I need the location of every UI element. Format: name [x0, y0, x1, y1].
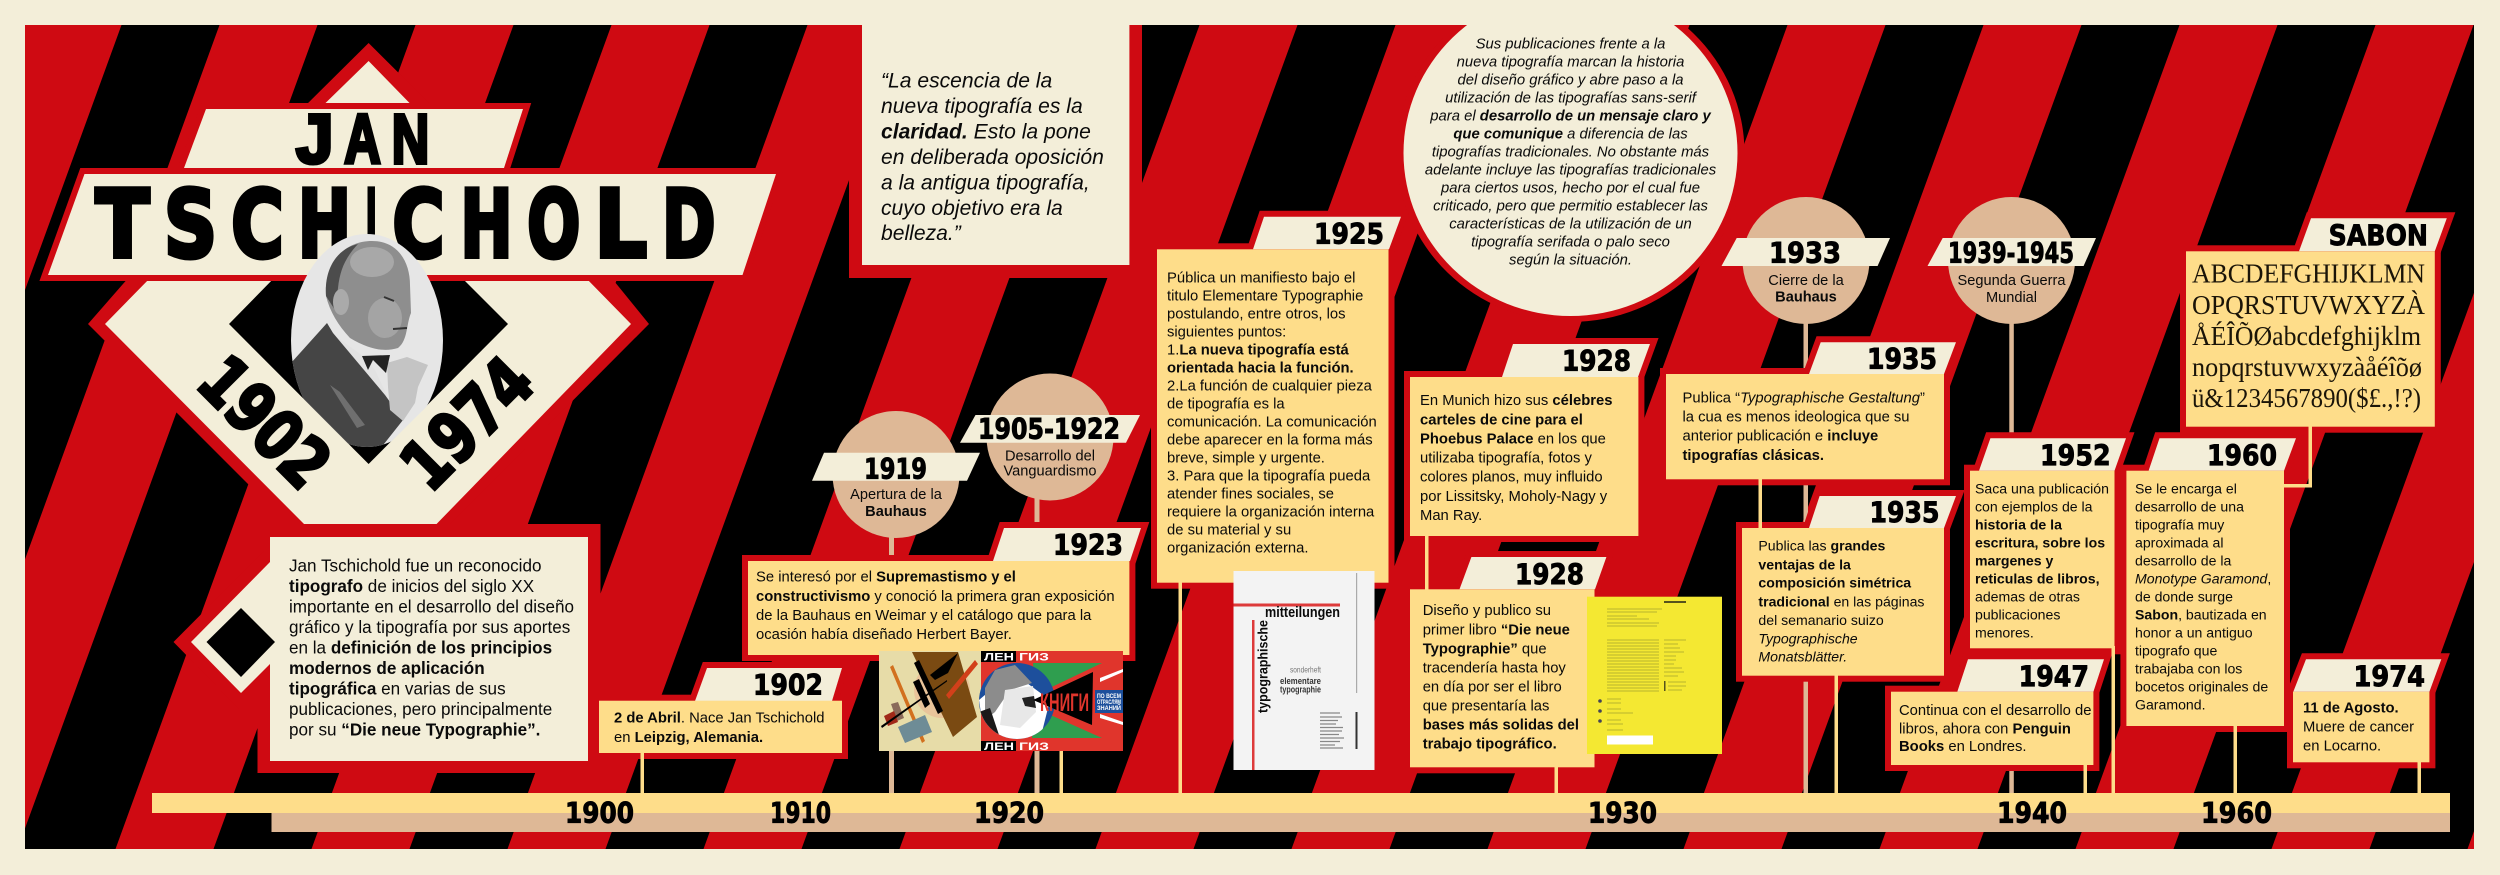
- event: 1902 box: en Leipzig, Alemania.: [614, 730, 763, 746]
- image: mitteilungen cover: elementare: [1280, 676, 1321, 687]
- timeline year labels: 1900: [565, 797, 634, 830]
- panel: circle about publications: [1396, 0, 1744, 322]
- image: Rodchenko book poster: [979, 651, 1123, 753]
- event: 1933 circle: Bauhaus: [1775, 290, 1837, 306]
- event: 1960 box: desarrollo de la: [2135, 552, 2232, 568]
- event: 1928 box, Die neue Typographie: tracendería hasta hoy: [1423, 660, 1566, 676]
- panel: Sabon specimen: OPQRSTUVWXYZÀ: [2192, 290, 2425, 320]
- event: 1960 box: de donde surge: [2135, 588, 2233, 604]
- event: 1925 box: requiere la organización interna: [1167, 504, 1375, 520]
- event: 1902 box: [599, 668, 842, 753]
- quote text: cuyo objetivo era la: [881, 197, 1063, 220]
- event: 1960 box: tipografía muy: [2135, 516, 2225, 532]
- event: 1960 box: Sabon, bautizada en: [2135, 606, 2267, 622]
- panel: Sabon specimen: SABON: [2329, 220, 2428, 253]
- circle text: características de la utilización de un: [1449, 216, 1692, 232]
- event: 1960 box: honor a un antiguo: [2135, 624, 2253, 640]
- event: 1928 box, cinema posters: colores planos, muy influido: [1420, 470, 1603, 486]
- name banner TSCHICHOLD: H: [460, 170, 512, 278]
- lower diamond with black centre: [88, 276, 649, 540]
- circle text: para el desarrollo de un mensaje claro y: [1429, 108, 1711, 124]
- circle text: según la situación.: [1509, 252, 1632, 268]
- event: 1935 box, composición simétrica: del semanario suizo: [1758, 612, 1884, 628]
- name banner TSCHICHOLD: C: [392, 170, 444, 278]
- name banner TSCHICHOLD: L: [594, 170, 647, 278]
- event: 1952 box: margenes y: [1975, 552, 2054, 568]
- event: 1952 box: ademas de otras: [1975, 588, 2080, 604]
- event: 1928 box, cinema posters: utilizaba tipografía, fotos y: [1420, 450, 1593, 466]
- name banner TSCHICHOLD: C: [231, 170, 284, 278]
- event: 1933 circle: Cierre de la: [1768, 273, 1845, 289]
- event: 1925 box: de tipografía es la: [1167, 396, 1285, 412]
- event: 1923 box: [748, 528, 1141, 655]
- biography text: gráfico y la tipografía por sus aportes: [289, 618, 570, 637]
- biography text: importante en el desarrollo del diseño: [289, 598, 574, 617]
- event: 1960 box: tipografo que: [2135, 642, 2217, 658]
- image: Rodchenko book poster: ГИЗ: [1019, 741, 1049, 753]
- event: 1919 circle: Bauhaus: [865, 504, 927, 520]
- name banner JAN: [184, 100, 523, 178]
- name banner TSCHICHOLD: S: [164, 170, 217, 278]
- event: 1960 box: [2126, 438, 2296, 726]
- event: 1905-1922 circle: 1905-1922: [978, 413, 1120, 446]
- image: Rodchenko book poster: ЗНАНИЙ: [1097, 704, 1121, 712]
- event: 1947 box: [1891, 659, 2104, 765]
- event: 1925 box: 3. Para que la tipografía pueda: [1167, 468, 1371, 484]
- event: 1960 box: aproximada al: [2135, 534, 2224, 550]
- panel: Sabon specimen: ü&1234567890($£.,!?): [2192, 383, 2421, 413]
- biography text: Jan Tschichold fue un reconocido: [289, 557, 541, 576]
- circle text: del diseño gráfico y abre paso a la: [1457, 72, 1684, 88]
- event: 1935 box, Typographische Gestaltung: [1666, 342, 1956, 479]
- circle text: que comunique a diferencia de las: [1453, 126, 1688, 142]
- name banner TSCHICHOLD: O: [527, 170, 580, 278]
- panel: Sabon specimen: [2186, 218, 2447, 427]
- timeline year labels: 1920: [974, 797, 1044, 830]
- triangle ornament: [300, 43, 437, 111]
- event: 1928 box, Die neue Typographie: bases más solidas del: [1423, 717, 1579, 733]
- event: 1952 box: publicaciones: [1975, 606, 2060, 622]
- event: 1935 box, Typographische Gestaltung: anterior publicación e incluye: [1682, 429, 1878, 445]
- event: 1928 box, Die neue Typographie: Typographie” que: [1423, 641, 1547, 657]
- event: 1974 box: [2293, 659, 2441, 762]
- event: 1928 box, cinema posters: Man Ray.: [1420, 508, 1482, 524]
- red outlines behind the timeline boxes: [599, 217, 2447, 767]
- event: 1928 box, cinema posters: En Munich hizo sus célebres: [1420, 393, 1612, 409]
- event: 1928 box, Die neue Typographie: que presentaría las: [1423, 699, 1549, 715]
- event: 1935 box, composición simétrica: Typographische: [1758, 630, 1858, 646]
- event: 1935 box, composición simétrica: [1742, 496, 1956, 676]
- event: 1925 box: atender fines sociales, se: [1167, 486, 1334, 502]
- event: 1925 box: 2.La función de cualquier pieza: [1167, 378, 1373, 394]
- event: 1974 box: en Locarno.: [2303, 739, 2381, 755]
- image: mitteilungen cover: [1234, 571, 1374, 770]
- event: 1925 box: [1157, 217, 1401, 583]
- panel: Sabon specimen: ÅÉÎÕØabcdefghijklm: [2192, 321, 2421, 351]
- event: 1925 box: orientada hacia la función.: [1167, 360, 1354, 376]
- circle text: adelante incluye las tipografías tradicionales: [1425, 162, 1717, 178]
- event: 1960 box: Se le encarga el: [2135, 480, 2237, 496]
- event: 1925 box: de su material y su: [1167, 522, 1291, 538]
- event: 1928 box, Die neue Typographie: en día por ser el libro: [1423, 680, 1562, 696]
- event: 1902 box: 2 de Abril. Nace Jan Tschichold: [614, 710, 825, 726]
- event: 1928 box, cinema posters: Phoebus Palace en los que: [1420, 431, 1606, 447]
- name banner TSCHICHOLD: T: [96, 170, 149, 278]
- event: 1947 box: libros, ahora con Penguin: [1899, 721, 2071, 737]
- event: 1902 box: 1902: [753, 669, 823, 702]
- event: 1923 box: ocasión había diseñado Herbert Bayer.: [756, 627, 1012, 643]
- event: 1925 box: 1925: [1314, 218, 1384, 251]
- event: 1923 box: Se interesó por el Supremastismo y el: [756, 570, 1016, 586]
- event: 1935 box, Typographische Gestaltung: Publica “Typographische Gestaltung”: [1682, 390, 1925, 406]
- tan connector stems for the circles: [889, 320, 2014, 795]
- event: 1960 box: trabajaba con los: [2135, 660, 2242, 676]
- event: 1925 box: 1.La nueva tipografía está: [1167, 342, 1350, 358]
- birth year 1902: 1902: [182, 341, 345, 505]
- name banner TSCHICHOLD: I: [366, 170, 377, 278]
- event: 1905-1922 circle: Desarrollo del: [1005, 449, 1095, 465]
- image: Rodchenko book poster: ЛЕН: [984, 652, 1014, 664]
- event: 1919 circle: 1919: [864, 453, 927, 486]
- event: 1935 box, composición simétrica: 1935: [1870, 497, 1940, 530]
- image: Rodchenko book poster: ЛЕН: [984, 741, 1014, 753]
- circle text: Sus publicaciones frente a la: [1476, 36, 1665, 52]
- circle text: nueva tipografía marcan la historia: [1457, 54, 1684, 70]
- event: 1928 box, cinema posters: [1410, 344, 1650, 536]
- event: 1960 box: desarrollo de una: [2135, 498, 2244, 514]
- event: 1935 box, Typographische Gestaltung: 1935: [1867, 343, 1937, 376]
- biography text: en la definición de los principios: [289, 639, 552, 658]
- event: 1905-1922 circle: Vanguardismo: [1003, 464, 1097, 480]
- event: 1939-1945 circle: [1928, 197, 2096, 324]
- event: 1960 box: bocetos originales de: [2135, 678, 2268, 694]
- image: yellow book page: [1587, 597, 1722, 754]
- event: 1923 box: de la Bauhaus en Weimar y el catálogo que para la: [756, 608, 1092, 624]
- biography text: tipográfica en varias de sus: [289, 680, 506, 699]
- event: 1974 box: Muere de cancer: [2303, 720, 2414, 736]
- event: 1928 box, Die neue Typographie: primer libro “Die neue: [1423, 622, 1570, 638]
- circle text: [1425, 36, 1717, 268]
- image: mitteilungen cover: mitteilungen: [1265, 605, 1340, 621]
- event: 1952 box: 1952: [2040, 439, 2111, 472]
- death year 1974: 1974: [386, 343, 550, 506]
- panel: Sabon specimen: nopqrstuvwxyzàåéîõø: [2192, 352, 2422, 382]
- timeline year labels: [565, 797, 2272, 830]
- quote text: [881, 70, 1104, 245]
- timeline year labels: 1910: [770, 797, 831, 830]
- biography text: modernos de aplicación: [289, 659, 485, 678]
- icon: black diamond: [206, 608, 275, 677]
- panel: biography: [174, 524, 600, 773]
- event: 1935 box, composición simétrica: composición simétrica: [1758, 575, 1911, 591]
- event: 1952 box: menores.: [1975, 624, 2034, 640]
- event: 1935 box, composición simétrica: ventajas de la: [1758, 556, 1851, 572]
- event: 1960 box: Garamond.: [2135, 696, 2206, 712]
- event: 1919 circle: Apertura de la: [850, 487, 943, 503]
- image: mitteilungen cover: typographie: [1280, 685, 1321, 696]
- event: 1928 box, Die neue Typographie: 1928: [1515, 558, 1584, 591]
- event: 1928 box, cinema posters: por Lissitsky, Moholy-Nagy y: [1420, 489, 1608, 505]
- event: 1935 box, composición simétrica: tradicional en las páginas: [1758, 594, 1924, 610]
- event: 1925 box: titulo Elementare Typographie: [1167, 288, 1363, 304]
- name banner JAN: J: [296, 100, 334, 178]
- biography text: publicaciones, pero principalmente: [289, 700, 552, 719]
- event: 1905-1922 circle: [960, 374, 1140, 500]
- quote text: a la antigua tipografía,: [881, 172, 1090, 194]
- event: 1928 box, Die neue Typographie: [1410, 557, 1606, 767]
- circle text: tipografía serifada o palo seco: [1471, 234, 1670, 250]
- event: 1939-1945 circle: Segunda Guerra: [1958, 273, 2066, 289]
- event: 1923 box: constructivismo y conoció la primera gran exposición: [756, 589, 1115, 605]
- quote text: nueva tipografía es la: [881, 95, 1083, 118]
- event: 1928 box, cinema posters: carteles de cine para el: [1420, 412, 1583, 428]
- image: suprematist painting: [879, 651, 981, 751]
- name banner TSCHICHOLD: D: [662, 170, 716, 278]
- event: 1935 box, Typographische Gestaltung: tipografías clásicas.: [1682, 448, 1824, 464]
- event: 1974 box: 1974: [2354, 661, 2425, 694]
- event: 1935 box, composición simétrica: Monatsblätter.: [1758, 649, 1847, 665]
- event: 1952 box: con ejemplos de la: [1975, 498, 2093, 514]
- quote text: en deliberada oposición: [881, 146, 1104, 169]
- yellow connector stems for the boxes: [640, 425, 2421, 795]
- event: 1925 box: debe aparecer en la forma más: [1167, 432, 1373, 448]
- image: Rodchenko book poster: КНИГИ: [1040, 689, 1089, 717]
- biography text: [289, 557, 574, 740]
- event: 1952 box: [1970, 438, 2126, 648]
- title block: [48, 43, 776, 540]
- timeline year labels: 1960: [2201, 797, 2272, 830]
- panel: quote: [849, 25, 1142, 278]
- name banner TSCHICHOLD: H: [298, 170, 351, 278]
- biography text: tipografo de inicios del siglo XX: [289, 577, 535, 596]
- event: 1952 box: reticulas de libros,: [1975, 570, 2100, 586]
- timeline year labels: 1930: [1588, 797, 1657, 830]
- image: Rodchenko book poster: ГИЗ: [1019, 652, 1049, 664]
- name banner JAN: N: [392, 100, 429, 178]
- event: 1952 box: escritura, sobre los: [1975, 534, 2105, 550]
- event: 1928 box, Die neue Typographie: Diseño y publico su: [1423, 603, 1551, 619]
- circle text: utilización de las tipografías sans-serif: [1445, 90, 1698, 106]
- image: Rodchenko book poster: ПО ВСЕМ: [1097, 694, 1121, 700]
- panel: Sabon specimen: ABCDEFGHIJKLMN: [2192, 259, 2425, 289]
- event: 1923 box: 1923: [1053, 529, 1123, 562]
- event: 1939-1945 circle: Mundial: [1986, 290, 2037, 306]
- event: 1939-1945 circle: 1939-1945: [1948, 237, 2074, 270]
- event: 1935 box, Typographische Gestaltung: la cua es menos ideologica que su: [1682, 410, 1910, 426]
- event: 1933 circle: [1722, 197, 1890, 324]
- event: 1947 box: Books en Londres.: [1899, 739, 2026, 755]
- event: 1947 box: 1947: [2019, 661, 2089, 694]
- event: 1925 box: siguientes puntos:: [1167, 324, 1286, 340]
- event: 1935 box, composición simétrica: Publica las grandes: [1758, 538, 1885, 554]
- circle text: para ciertos usos, hecho por el cual fue: [1440, 180, 1700, 196]
- portrait photo: [291, 234, 443, 447]
- quote text: belleza.”: [881, 222, 962, 245]
- event: 1960 box: 1960: [2207, 439, 2277, 472]
- name banner TSCHICHOLD: [48, 170, 776, 278]
- circle text: tipografías tradicionales. No obstante más: [1432, 144, 1710, 160]
- event: 1974 box: 11 de Agosto.: [2303, 701, 2399, 717]
- event: 1928 box, cinema posters: 1928: [1562, 345, 1631, 378]
- event: 1960 box: Monotype Garamond,: [2135, 570, 2271, 586]
- image: Rodchenko book poster: ОТРАСЛЯМ: [1097, 700, 1121, 706]
- event: 1925 box: breve, simple y urgente.: [1167, 450, 1325, 466]
- timeline bars: [152, 793, 2450, 832]
- event: 1925 box: postulando, entre otros, los: [1167, 306, 1346, 322]
- event: 1933 circle: 1933: [1769, 237, 1841, 270]
- quote text: “La escencia de la: [881, 70, 1052, 93]
- event: 1925 box: comunicación. La comunicación: [1167, 414, 1377, 430]
- quote text: claridad. Esto la pone: [881, 121, 1091, 144]
- event: 1952 box: Saca una publicación: [1975, 480, 2109, 496]
- event: 1928 box, Die neue Typographie: trabajo tipográfico.: [1423, 736, 1557, 752]
- name banner JAN: A: [344, 100, 381, 178]
- circle text: criticado, pero que permitio establecer las: [1433, 198, 1708, 214]
- image: mitteilungen cover: sonderheft: [1290, 665, 1321, 675]
- event: 1952 box: historia de la: [1975, 516, 2062, 532]
- image: mitteilungen cover: typographische: [1254, 620, 1270, 713]
- timeline year labels: 1940: [1997, 797, 2067, 830]
- event: 1919 circle: [812, 411, 980, 538]
- event: 1925 box: organización externa.: [1167, 540, 1308, 556]
- event: 1947 box: Continua con el desarrollo de: [1899, 703, 2091, 719]
- biography text: por su “Die neue Typographie”.: [289, 721, 540, 740]
- event: 1925 box: Pública un manifiesto bajo el: [1167, 270, 1355, 286]
